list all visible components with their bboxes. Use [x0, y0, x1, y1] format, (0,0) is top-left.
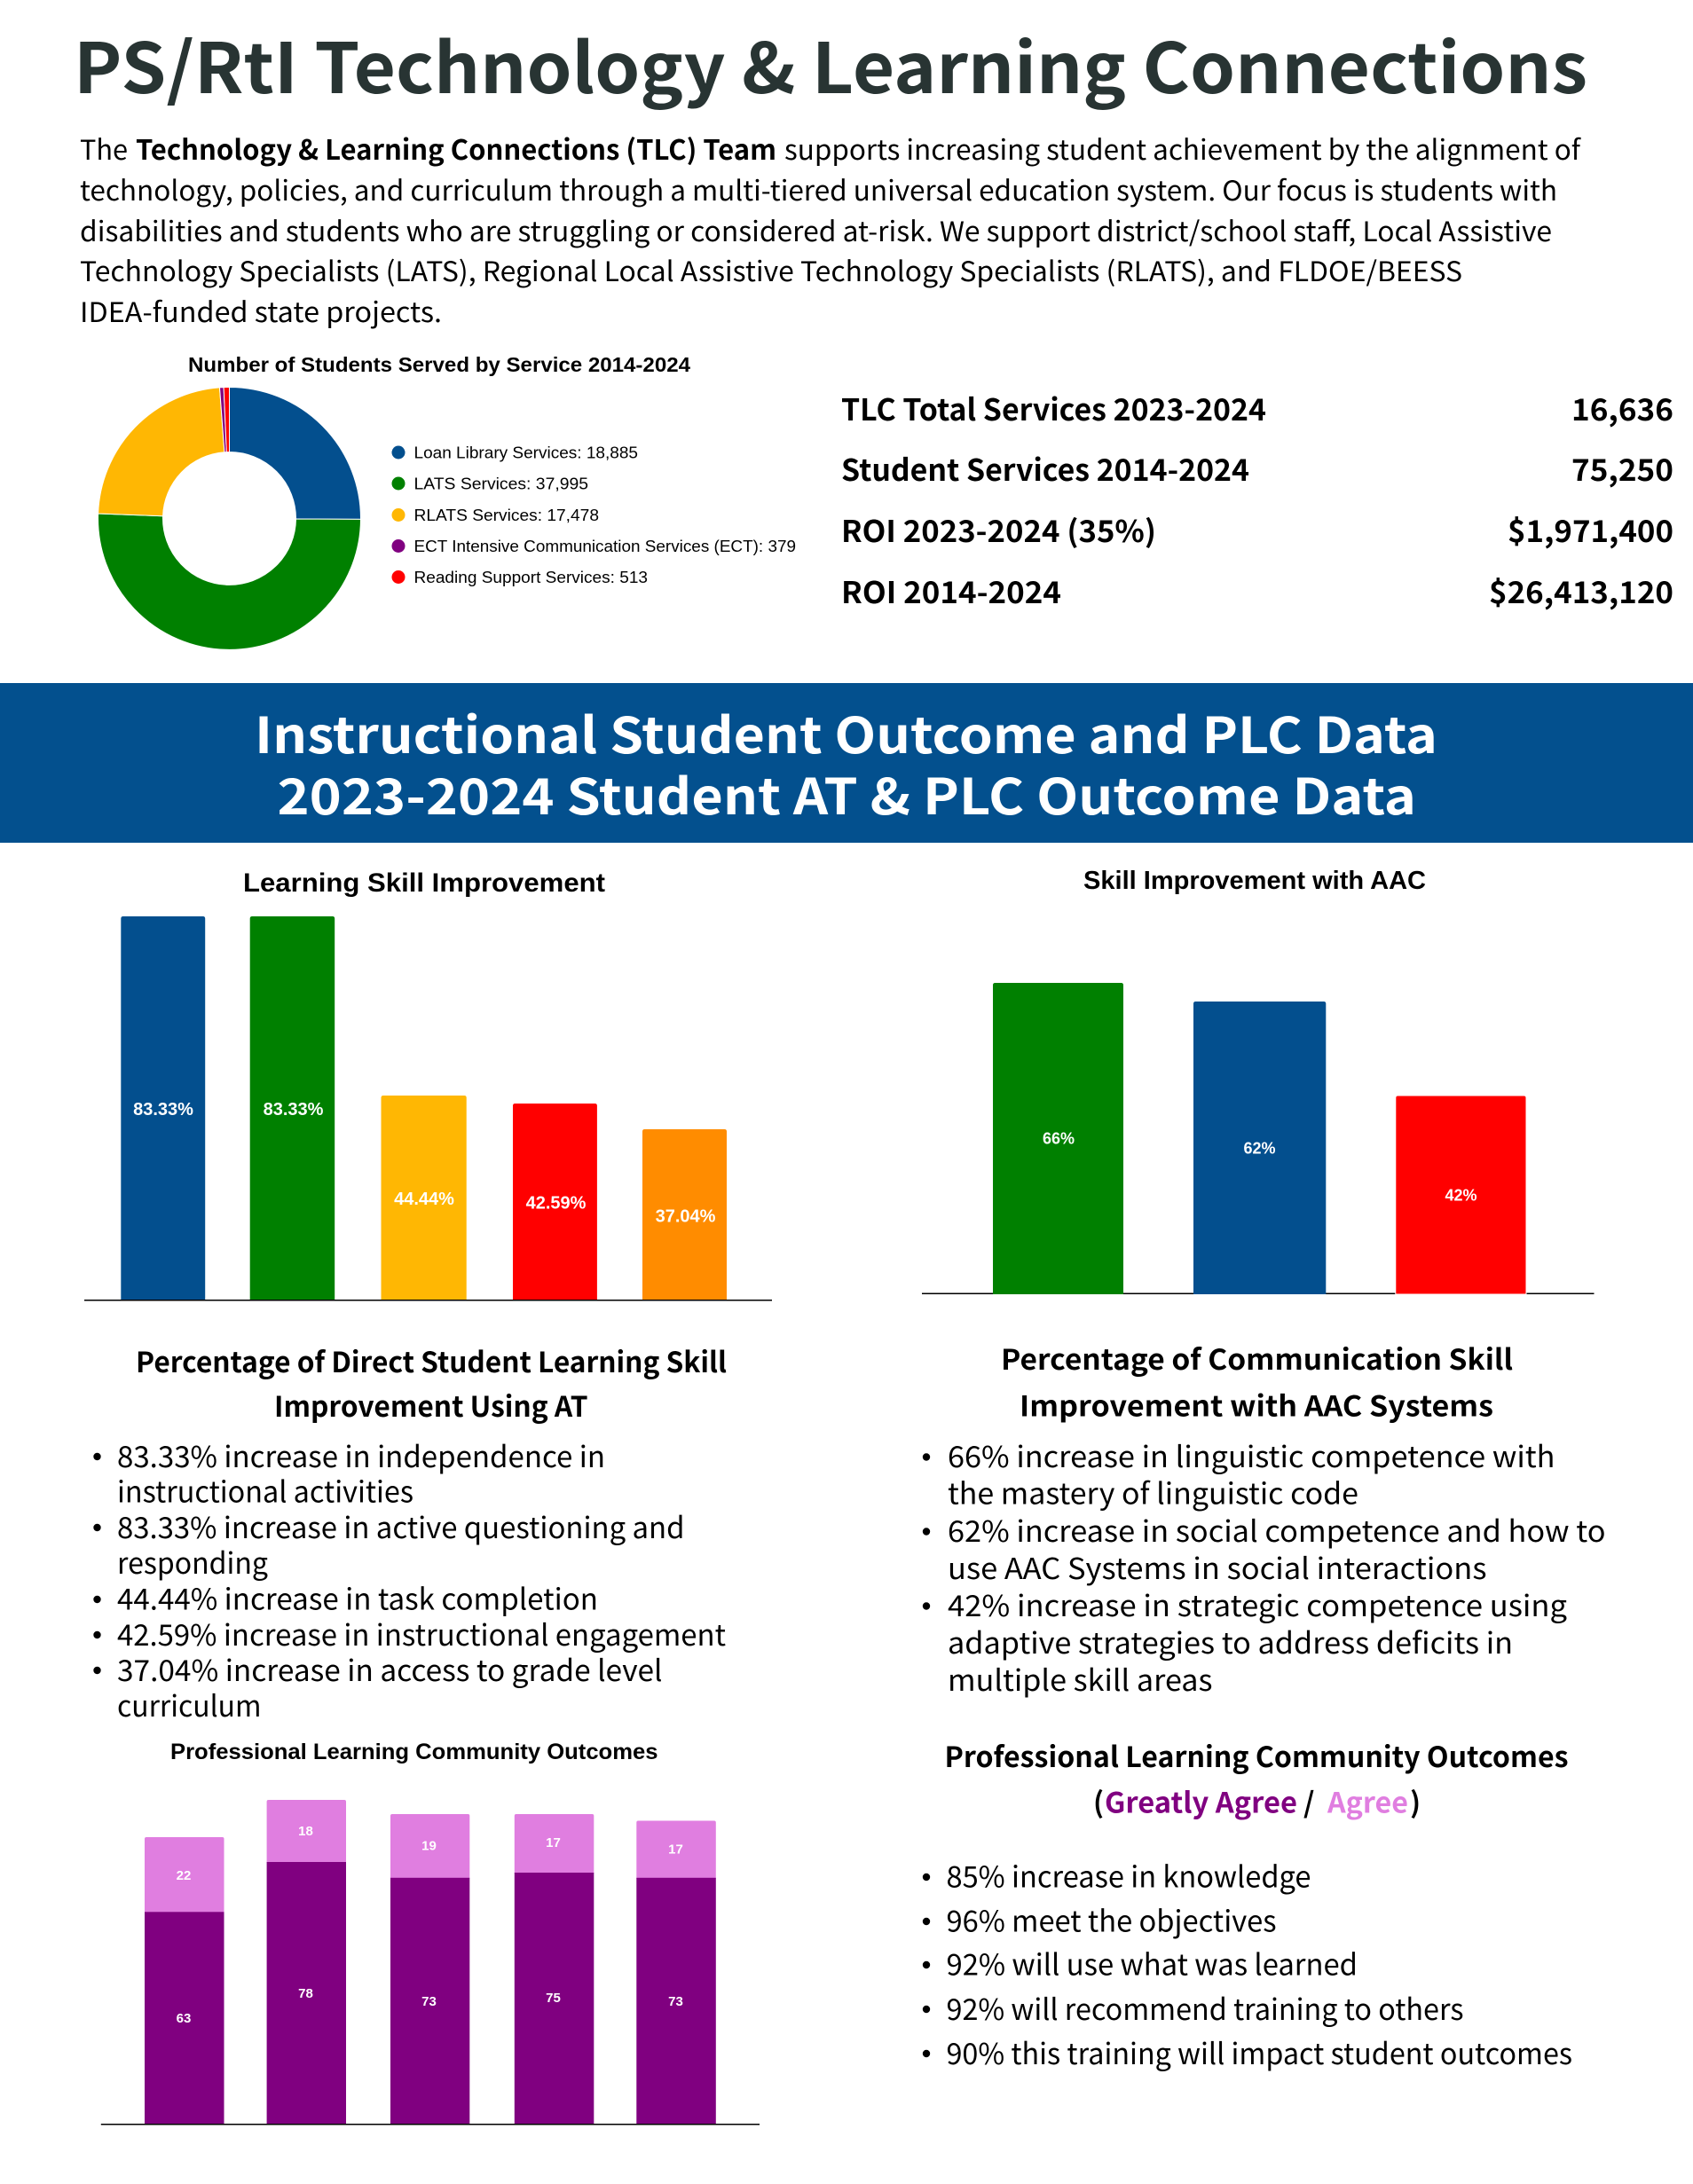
bullet list: 90% this training will impact student outcomes	[946, 2031, 1572, 2073]
bullet list: instructional activities	[117, 1469, 413, 1512]
legend heading: Agree	[1327, 1781, 1408, 1822]
legend heading: (	[1093, 1781, 1104, 1822]
bullet list: 83.33% increase in active questioning and	[117, 1504, 685, 1547]
heading	[136, 1340, 727, 1426]
bullet list: 85% increase in knowledge	[946, 1854, 1311, 1897]
bullet list: 62% increase in social competence and how to	[948, 1508, 1606, 1551]
panel: key statistics: ROI 2014-2024	[841, 569, 1061, 612]
bars	[121, 916, 727, 1300]
banner: 2023-2024 Student AT & PLC Outcome Data	[277, 758, 1416, 829]
bar values: 37.04%	[656, 1206, 716, 1226]
donut chart	[98, 387, 361, 649]
panel: direct student learning text	[93, 1340, 727, 1725]
bullet list: multiple skill areas	[948, 1657, 1212, 1700]
segment values: 19	[421, 1838, 437, 1854]
bar values: 66%	[1043, 1130, 1075, 1148]
bullet list	[93, 1434, 726, 1725]
heading: Improvement with AAC Systems	[1020, 1384, 1493, 1425]
bullet list: responding	[117, 1540, 268, 1583]
panel: communication skill text	[923, 1338, 1606, 1700]
donut chart title: Number of Students Served by Service 2014-2024	[188, 353, 690, 376]
heading	[1001, 1338, 1513, 1425]
bullet list: the mastery of linguistic code	[948, 1471, 1358, 1513]
chart title: Skill Improvement with AAC	[1083, 867, 1426, 895]
donut chart legend: LATS Services: 37,995	[413, 475, 588, 493]
bullet list: 96% meet the objectives	[946, 1898, 1276, 1941]
panel: key statistics: $26,413,120	[1489, 569, 1673, 612]
bullet list: 42.59% increase in instructional engagement	[117, 1612, 726, 1654]
bullet list: 92% will recommend training to others	[946, 1986, 1464, 2029]
axis	[101, 2124, 760, 2125]
segment values: 17	[546, 1835, 561, 1850]
panel: key statistics	[841, 386, 1673, 612]
heading: Improvement Using AT	[274, 1385, 587, 1426]
intro text block: supports increasing student achievement by the alignment of	[784, 128, 1582, 168]
bullet list	[923, 1854, 1572, 2073]
segment values: 75	[546, 1991, 561, 2006]
bar values: 42%	[1445, 1187, 1477, 1205]
segment values: 73	[668, 1994, 683, 2009]
bar values	[1043, 1130, 1477, 1205]
panel: key statistics: TLC Total Services 2023-2024	[841, 386, 1266, 429]
bar values	[133, 1100, 716, 1226]
bar values: 44.44%	[394, 1190, 454, 1209]
bar values: 62%	[1243, 1139, 1276, 1157]
chart title: Professional Learning Community Outcomes	[170, 1740, 658, 1764]
heading: Percentage of Communication Skill	[1001, 1338, 1513, 1379]
panel: key statistics: $1,971,400	[1508, 507, 1673, 551]
donut chart legend: Reading Support Services: 513	[413, 569, 648, 586]
bullet list: 42% increase in strategic competence using	[948, 1583, 1567, 1625]
intro text block: IDEA-funded state projects.	[80, 290, 442, 330]
segment values: 63	[177, 2011, 191, 2026]
heading: Professional Learning Community Outcomes	[944, 1735, 1569, 1776]
bullet list: 66% increase in linguistic competence with	[948, 1434, 1555, 1476]
bullet list: curriculum	[117, 1683, 261, 1725]
bullet list	[923, 1434, 1606, 1700]
bar values: 83.33%	[264, 1100, 324, 1119]
bullet list: use AAC Systems in social interactions	[948, 1545, 1487, 1588]
intro text block	[80, 128, 1582, 330]
legend heading: )	[1410, 1781, 1421, 1822]
bar values: 42.59%	[526, 1194, 587, 1214]
intro text block: Technology & Learning Connections (TLC) Team	[136, 128, 776, 168]
bars	[993, 983, 1526, 1294]
intro text block: The	[80, 128, 128, 168]
title: PS/RtI Technology & Learning Connections	[74, 14, 1587, 114]
bullet list: 37.04% increase in access to grade level	[117, 1647, 662, 1690]
bullet list: adaptive strategies to address deficits in	[948, 1620, 1513, 1662]
bullet list: 44.44% increase in task completion	[117, 1575, 598, 1618]
panel: key statistics: ROI 2023-2024 (35%)	[841, 507, 1156, 551]
chart title: Learning Skill Improvement	[243, 868, 605, 898]
segment values: 78	[298, 1986, 313, 2001]
donut chart legend: Loan Library Services: 18,885	[413, 444, 638, 461]
segment values: 17	[668, 1842, 683, 1858]
panel: PLC outcomes text	[923, 1735, 1572, 2073]
intro text block: Technology Specialists (LATS), Regional Local Assistive Technology Specialists (RLATS), and FLDOE/BEESS	[80, 249, 1462, 289]
panel: students served donut chart	[98, 353, 796, 649]
axis	[922, 1293, 1594, 1294]
legend heading	[1093, 1781, 1421, 1822]
intro text block: disabilities and students who are struggling or considered at-risk. We support district/school staff, Local Assistive	[80, 209, 1552, 249]
segment values: 18	[298, 1824, 313, 1839]
banner: Instructional Student Outcome and PLC Data	[255, 696, 1437, 768]
panel: PLC stacked bar chart	[101, 1740, 760, 2125]
panel: key statistics: 16,636	[1571, 386, 1673, 429]
greatly agree segments	[145, 1862, 716, 2125]
bullet list: 92% will use what was learned	[946, 1941, 1358, 1984]
panel: key statistics: Student Services 2014-2024	[841, 446, 1249, 490]
panel: key statistics: 75,250	[1571, 446, 1673, 490]
segment values: 73	[421, 1994, 437, 2009]
donut chart legend: ECT Intensive Communication Services (ECT): 379	[413, 538, 796, 555]
bullet list: 83.33% increase in independence in	[117, 1434, 605, 1476]
legend heading: Greatly Agree	[1105, 1781, 1297, 1822]
heading: Percentage of Direct Student Learning Skill	[136, 1340, 727, 1381]
panel: AAC bar chart	[922, 867, 1594, 1294]
legend heading: /	[1303, 1781, 1314, 1822]
donut chart legend: RLATS Services: 17,478	[413, 507, 599, 524]
bar values: 83.33%	[133, 1100, 193, 1119]
intro text block: technology, policies, and curriculum through a multi-tiered universal education system. Our focus is students with	[80, 169, 1557, 208]
donut chart legend	[392, 444, 796, 586]
agree segments	[145, 1800, 716, 1913]
banner	[0, 683, 1693, 843]
segment values: 22	[177, 1868, 191, 1883]
panel: learning skill bar chart	[84, 868, 772, 1300]
segment values	[177, 1824, 683, 2026]
